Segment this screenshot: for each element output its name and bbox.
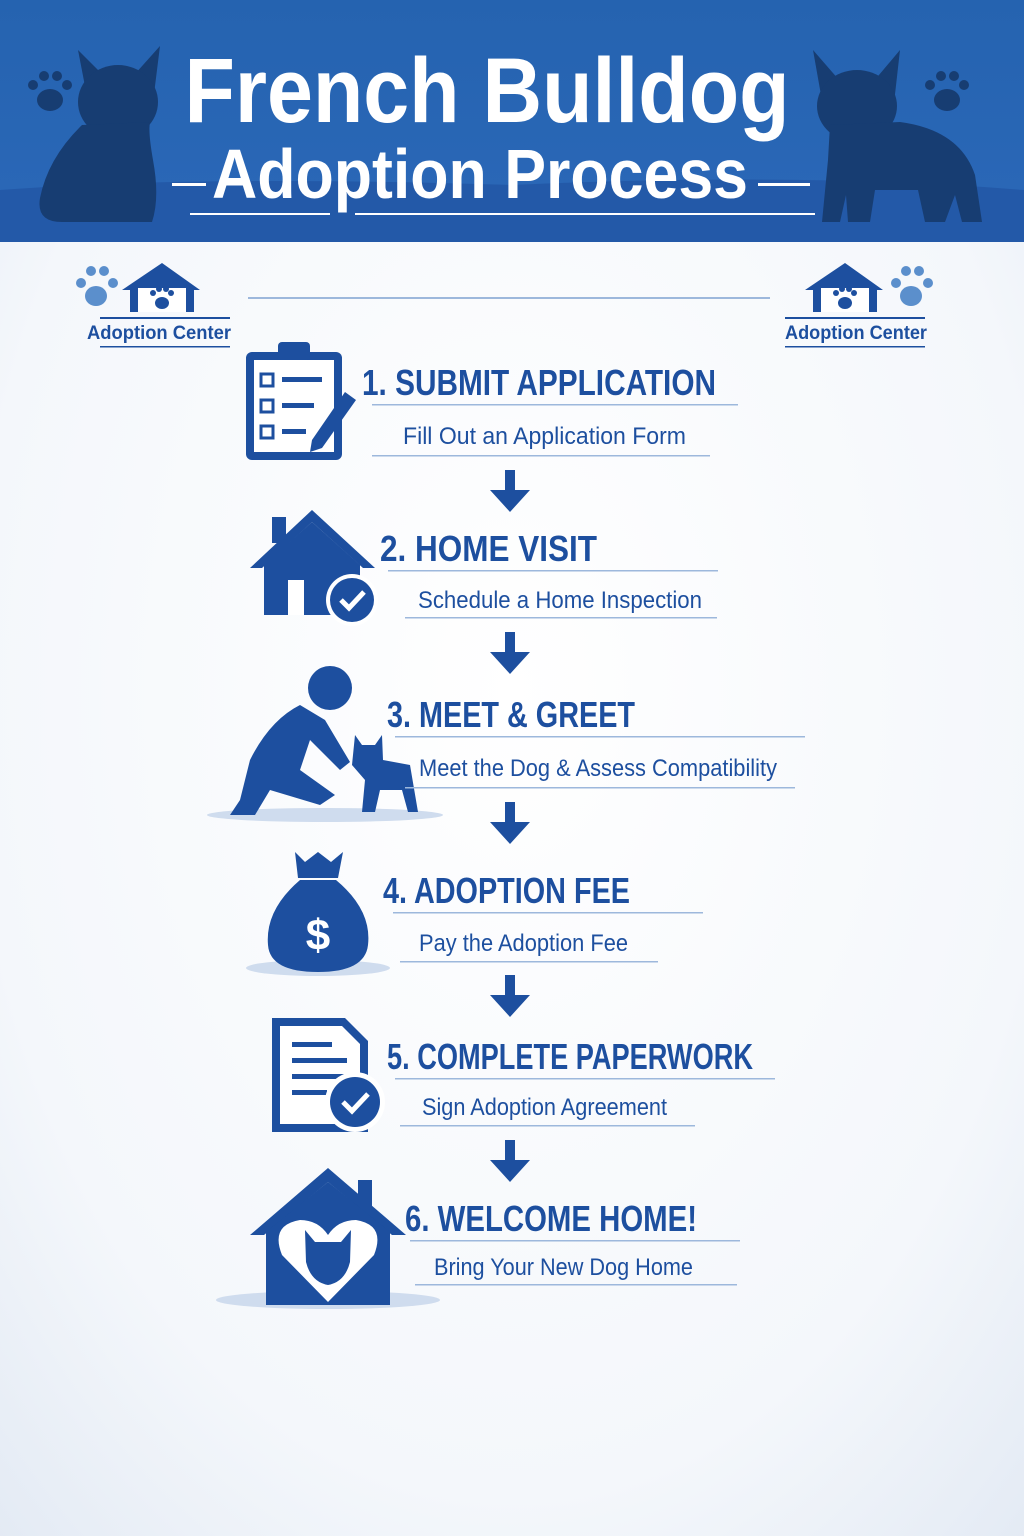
- step 4: 4. ADOPTION FEE: [383, 870, 630, 911]
- adoption center left: Adoption Center: [87, 323, 232, 344]
- left dog silhouette: [39, 46, 160, 222]
- icon: clipboard: [246, 342, 356, 460]
- step 5: Sign Adoption Agreement: [422, 1094, 667, 1121]
- arrow: [490, 470, 530, 512]
- header band: [0, 0, 1024, 242]
- icon: house with heart dog: [216, 1168, 440, 1309]
- icon: money bag: $: [306, 911, 330, 960]
- step 2: Schedule a Home Inspection: [418, 587, 702, 614]
- title: Adoption Process: [212, 135, 748, 213]
- step 2: 2. HOME VISIT: [380, 528, 597, 569]
- step 5: [272, 1018, 775, 1132]
- step 1: 1. SUBMIT APPLICATION: [362, 362, 716, 403]
- adoption center right: [785, 263, 933, 348]
- step 3: Meet the Dog & Assess Compatibility: [419, 755, 777, 782]
- step 2: [250, 510, 718, 626]
- step 4: [246, 852, 703, 976]
- icon: money bag: [246, 852, 390, 976]
- step 1: Fill Out an Application Form: [403, 423, 686, 450]
- title: [172, 40, 815, 215]
- step 6: [216, 1168, 740, 1309]
- right dog silhouette: [813, 50, 982, 222]
- adoption center right: Adoption Center: [785, 323, 928, 344]
- step 6: Bring Your New Dog Home: [434, 1254, 693, 1281]
- left paw: [28, 71, 72, 111]
- right paw: [925, 71, 969, 111]
- step 3: 3. MEET & GREET: [387, 694, 635, 735]
- step 6: 6. WELCOME HOME!: [405, 1198, 697, 1239]
- icon: house check: [250, 510, 378, 626]
- step 1: [246, 342, 738, 460]
- icon: person with dog: [207, 666, 443, 822]
- step 5: 5. COMPLETE PAPERWORK: [387, 1036, 753, 1077]
- icon: document check: [272, 1018, 385, 1132]
- step 4: Pay the Adoption Fee: [419, 930, 628, 957]
- title: French Bulldog: [184, 40, 790, 142]
- step 3: [207, 666, 805, 822]
- adoption center left: [76, 263, 232, 348]
